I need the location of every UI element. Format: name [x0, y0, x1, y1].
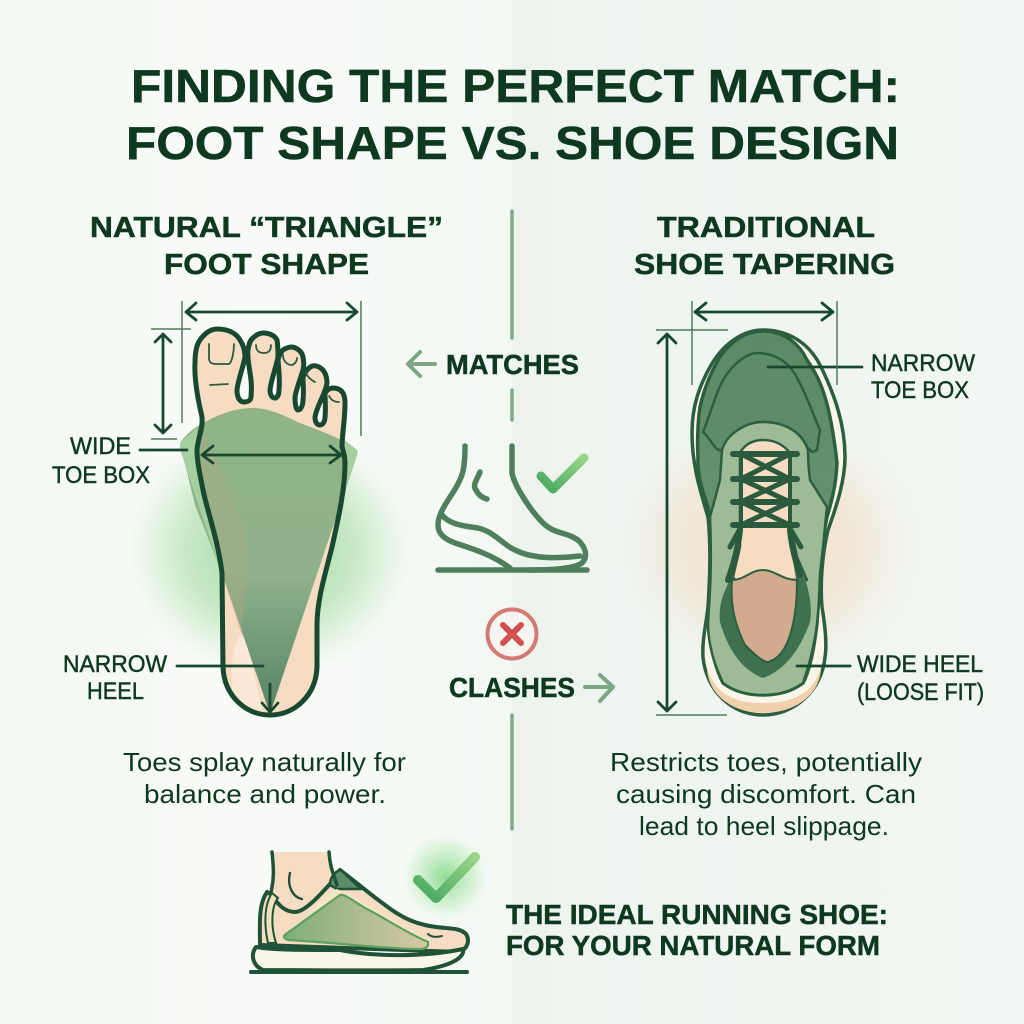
peach glow behind shoe: [620, 415, 920, 675]
sole: [253, 947, 463, 970]
green glow behind foot: [128, 425, 412, 675]
leg and ankle lines: [271, 852, 442, 937]
title: [126, 60, 900, 169]
panel: natural foot diagram: [52, 301, 412, 715]
heading: natural foot shape: [90, 212, 443, 281]
leg: [268, 852, 340, 940]
icon: foot in shoe with check: [438, 446, 587, 570]
arrow: matches: [408, 352, 435, 376]
heading: traditional shoe tapering: [634, 212, 895, 281]
text: ideal running shoe: FOR YOUR NATURAL FORM: [506, 930, 880, 961]
green triangle panel: [284, 895, 428, 949]
triangle overlay: [180, 408, 357, 714]
outer triangle light edges: [180, 428, 222, 573]
label: wide toe box: [52, 433, 150, 489]
label: narrow toe box: NARROW: [871, 350, 975, 377]
text: natural foot description: Toes splay naturally for: [123, 747, 406, 777]
arch shading: [200, 432, 248, 640]
heading: traditional shoe tapering: TRADITIONAL: [657, 212, 875, 244]
dimension arrows: [140, 303, 357, 712]
label: clashes: CLASHES: [449, 672, 575, 703]
heel highlight: [232, 630, 262, 710]
label: wide heel: [857, 651, 984, 706]
label: narrow heel: NARROW: [63, 651, 167, 678]
title: FINDING THE PERFECT MATCH:: [131, 60, 900, 112]
heading: natural foot shape: NATURAL “TRIANGLE”: [90, 212, 443, 244]
label: wide heel: WIDE HEEL: [857, 651, 983, 678]
label: narrow heel: HEEL: [87, 678, 144, 705]
label: wide toe box: WIDE: [70, 433, 131, 460]
foot sole: [195, 329, 345, 715]
label: narrow toe box: TOE BOX: [871, 377, 969, 404]
text: natural foot description: balance and power.: [144, 779, 386, 809]
green check: [541, 458, 584, 489]
title: FOOT SHAPE VS. SHOE DESIGN: [126, 117, 899, 169]
ground line: [251, 970, 467, 974]
tongue: [330, 870, 361, 889]
label: wide toe box: TOE BOX: [52, 462, 150, 489]
foot outline: [195, 329, 345, 715]
text: shoe description: causing discomfort. Can: [616, 779, 916, 809]
heel interior: [732, 570, 797, 662]
dimension arrows: [658, 303, 862, 711]
text: ideal running shoe: [506, 899, 888, 961]
text: shoe description: [610, 747, 922, 841]
midfoot panel: [708, 422, 827, 695]
collar: [720, 525, 811, 678]
text: shoe description: Restricts toes, potentially: [610, 747, 922, 777]
arrow: clashes: [585, 675, 613, 701]
icon: red x in circle: [488, 610, 536, 658]
toenails and creases: [209, 344, 339, 402]
heading: traditional shoe tapering: SHOE TAPERING: [634, 249, 895, 281]
label: matches: MATCHES: [446, 349, 579, 380]
text: ideal running shoe: THE IDEAL RUNNING SHOE:: [506, 899, 888, 930]
toe cap overlay: [703, 353, 820, 452]
label: narrow heel: [63, 651, 167, 705]
label: narrow toe box: [871, 350, 975, 404]
center divider: [510, 211, 514, 829]
icon: glowing check: [403, 835, 487, 919]
text: natural foot description: [123, 747, 406, 809]
heel peach band: [707, 668, 821, 713]
shoe upper: [260, 870, 468, 952]
text: shoe description: lead to heel slippage.: [639, 811, 889, 841]
shoe upper: [698, 331, 837, 695]
shoe midsole: [692, 330, 845, 715]
panel: traditional shoe diagram: [620, 301, 984, 715]
label: wide heel: (LOOSE FIT): [857, 679, 984, 706]
heading: natural foot shape: FOOT SHAPE: [164, 249, 369, 281]
icon: ideal running shoe: [251, 852, 468, 972]
cream band above panel: [290, 889, 432, 947]
tongue: [733, 440, 807, 580]
laces: [728, 454, 801, 580]
heel tab: [265, 893, 278, 943]
